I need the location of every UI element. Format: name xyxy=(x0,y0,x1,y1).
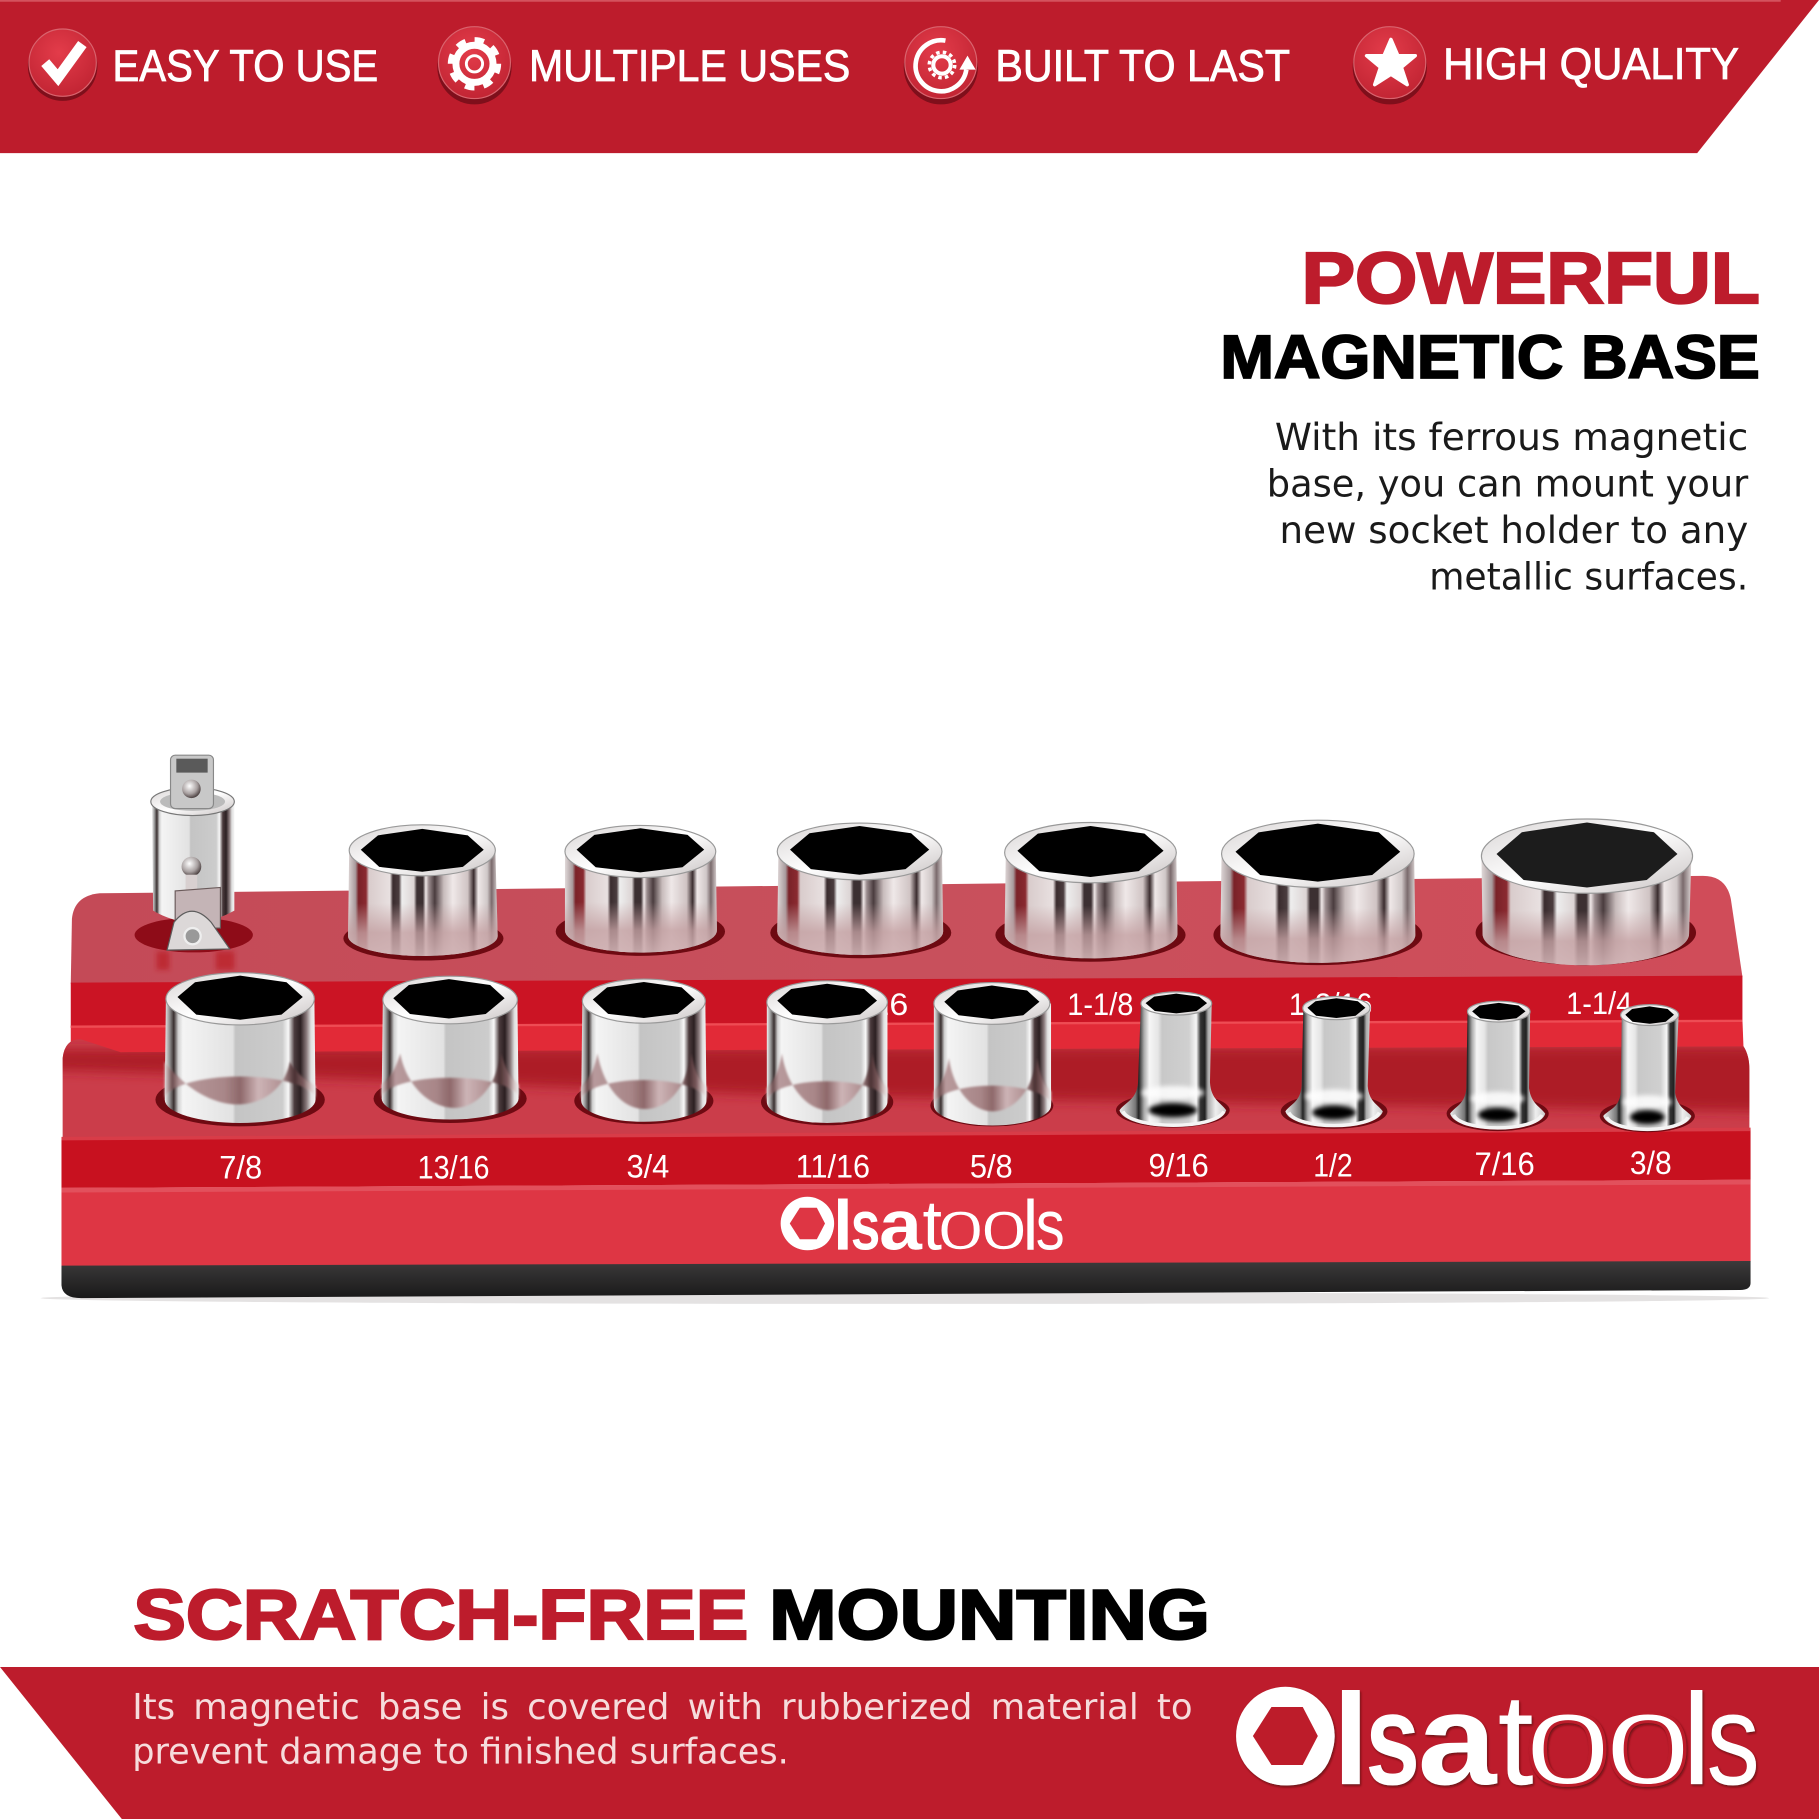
text block: scratch-free description: Its magnetic base is covered with rubberized material to xyxy=(132,1687,1193,1728)
feature: high quality xyxy=(1353,27,1739,104)
heading: powerful magnetic base: POWERFUL xyxy=(1302,239,1760,319)
top banner xyxy=(0,0,1819,153)
socket 5/8 xyxy=(930,983,1053,1126)
label band xyxy=(61,1130,1751,1188)
size labels: lower row: 3/4 xyxy=(626,1148,669,1184)
socket 3/4 xyxy=(574,979,713,1124)
lower tier shaded zone xyxy=(46,1046,1763,1111)
size labels: lower row: 5/8 xyxy=(970,1148,1013,1184)
socket adapter xyxy=(135,755,253,970)
sockets: upper row xyxy=(343,819,1696,965)
heading: scratch-free mounting: MOUNTING xyxy=(769,1575,1210,1654)
heading: scratch-free mounting xyxy=(133,1575,1210,1654)
socket 4 xyxy=(995,822,1186,962)
icon: check mark xyxy=(28,29,97,101)
sockets: lower row xyxy=(155,973,1695,1132)
label: MULTIPLE USES xyxy=(529,42,850,91)
socket 7/8 xyxy=(155,973,325,1126)
size labels: lower row: 11/16 xyxy=(796,1148,870,1184)
text block: magnetic base description: metallic surfaces. xyxy=(1429,555,1748,598)
icon: star xyxy=(1353,27,1427,104)
tray logo: O xyxy=(780,1185,837,1266)
text block: magnetic base description: new socket holder to any xyxy=(1280,509,1748,552)
tray logo: t xyxy=(923,1186,942,1265)
text block: magnetic base description xyxy=(1267,416,1749,598)
tray logo: a xyxy=(879,1186,923,1265)
size labels: upper row: 1-3/16 xyxy=(1289,987,1372,1022)
size labels: upper row: 1-1/16 xyxy=(812,987,908,1022)
upper tier front face xyxy=(71,976,1742,1028)
socket 13/16 xyxy=(374,976,527,1123)
text block: magnetic base description: base, you can mount your xyxy=(1267,463,1749,506)
brand logo: l xyxy=(1333,1666,1369,1812)
feature: easy to use xyxy=(28,29,378,101)
size labels: upper row: 1-1/8 xyxy=(1067,987,1133,1022)
size labels: lower row: 7/8 xyxy=(219,1150,262,1186)
product: magnetic socket tray xyxy=(41,755,1769,1304)
socket 9/16 xyxy=(1116,992,1230,1128)
size labels: upper row xyxy=(812,986,1632,1022)
socket 1 xyxy=(343,825,503,961)
brand logo: t xyxy=(1498,1666,1534,1812)
text block: scratch-free description: prevent damage to finished surfaces. xyxy=(132,1731,789,1772)
upper tier top surface xyxy=(71,876,1742,984)
socket 6 xyxy=(1476,819,1696,965)
size labels: lower row: 13/16 xyxy=(418,1150,490,1186)
label: EASY TO USE xyxy=(113,42,378,91)
socket 1/2 xyxy=(1281,997,1387,1129)
brand logo xyxy=(1235,1664,1760,1813)
bright band xyxy=(71,1020,1744,1053)
tray logo: s xyxy=(1036,1186,1065,1265)
tray logo: o xyxy=(937,1186,984,1266)
brand logo: s xyxy=(1365,1666,1420,1812)
black rubber base xyxy=(61,1261,1751,1298)
socket 2 xyxy=(556,825,725,956)
bottom banner xyxy=(0,1664,1819,1819)
brand logo: s xyxy=(1706,1666,1760,1812)
label: BUILT TO LAST xyxy=(995,42,1290,91)
icon: refresh gear xyxy=(904,27,978,104)
brand logo: O xyxy=(1235,1664,1339,1813)
tray logo: l xyxy=(833,1186,853,1265)
text block: magnetic base description: With its ferrous magnetic xyxy=(1275,416,1748,459)
tray logo xyxy=(780,1185,1065,1266)
brand logo: o xyxy=(1604,1665,1691,1813)
lower tier top surface xyxy=(63,1039,1749,1143)
socket 11/16 xyxy=(761,981,893,1125)
size labels: upper row: 1-1/4 xyxy=(1566,986,1632,1021)
tray shadow xyxy=(41,1292,1769,1304)
socket 5 xyxy=(1213,820,1422,965)
size labels: lower row: 7/16 xyxy=(1474,1146,1535,1182)
feature: built to last xyxy=(904,27,1290,104)
heading: powerful magnetic base: MAGNETIC BASE xyxy=(1220,323,1760,392)
tray logo: s xyxy=(851,1186,880,1265)
brand logo: o xyxy=(1524,1665,1611,1813)
socket 3/8 xyxy=(1600,1005,1695,1132)
label: HIGH QUALITY xyxy=(1443,40,1739,89)
lower front face xyxy=(61,1180,1751,1267)
heading: powerful magnetic base xyxy=(1220,239,1760,392)
brand logo: a xyxy=(1418,1666,1498,1812)
text block: scratch-free description xyxy=(132,1687,1193,1772)
size labels: lower row: 3/8 xyxy=(1630,1145,1672,1181)
tray logo: l xyxy=(1023,1186,1038,1265)
size labels: lower row: 1/2 xyxy=(1313,1147,1353,1183)
size labels: lower row xyxy=(219,1145,1672,1186)
heading: scratch-free mounting: SCRATCH-FREE xyxy=(133,1575,748,1654)
feature: multiple uses xyxy=(437,27,850,104)
tray logo: o xyxy=(980,1186,1028,1266)
socket 7/16 xyxy=(1447,1001,1549,1131)
brand logo: l xyxy=(1682,1666,1711,1812)
size labels: lower row: 9/16 xyxy=(1148,1147,1209,1183)
icon: gear xyxy=(437,27,512,104)
socket 3 xyxy=(770,823,951,958)
tray body xyxy=(46,876,1763,1298)
